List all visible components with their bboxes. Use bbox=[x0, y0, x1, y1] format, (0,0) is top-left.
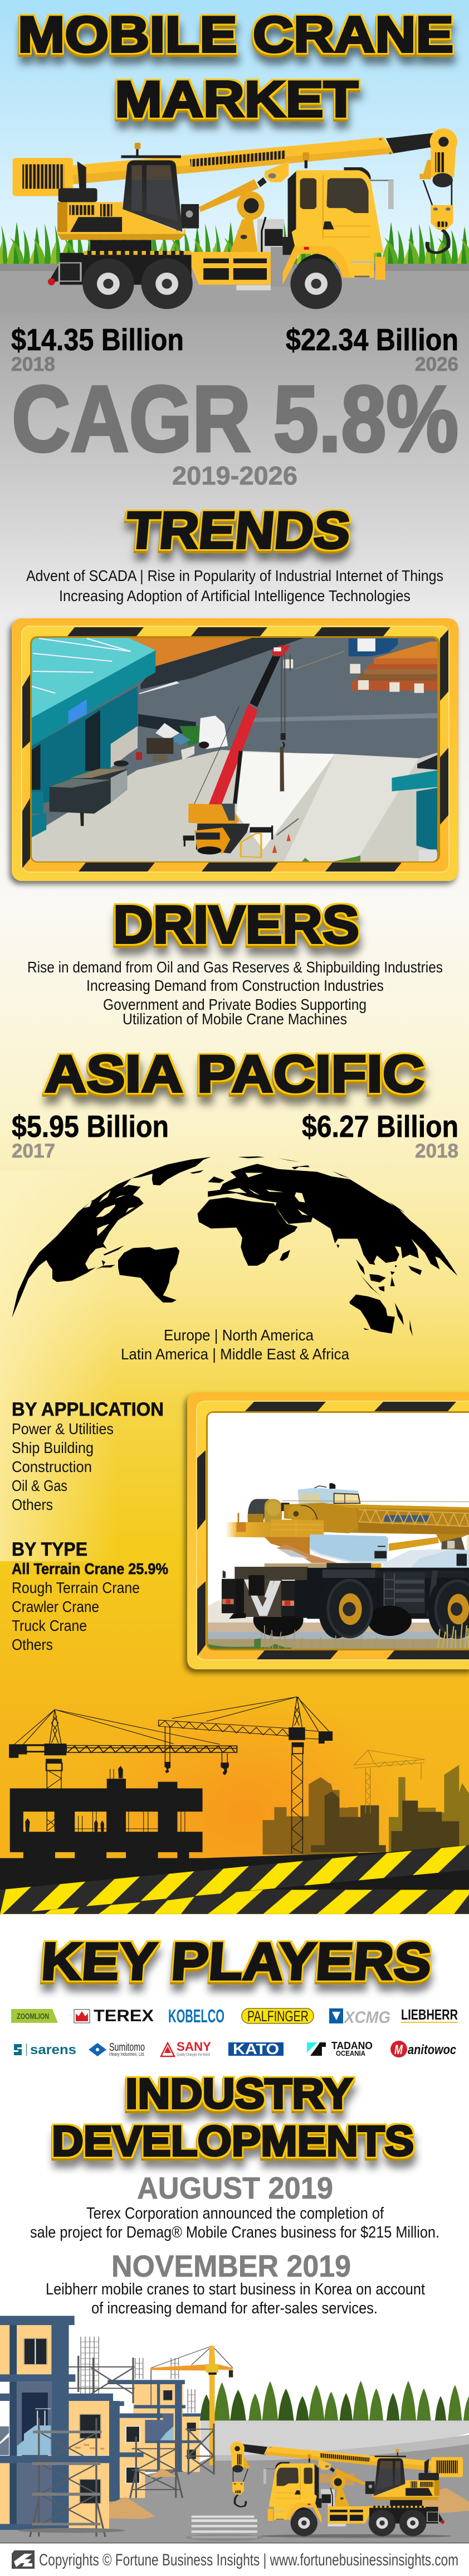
skyline bbox=[262, 1765, 469, 1854]
tower crane 2 bbox=[159, 1697, 329, 1853]
market value 2018: 2018 bbox=[11, 354, 55, 375]
logo: Manitowoc: anitowoc bbox=[408, 2042, 456, 2057]
rear tail with V marking bbox=[222, 1571, 309, 1636]
logo: Manitowoc bbox=[390, 2041, 456, 2057]
logo: Tadano Oceania: TADANO bbox=[331, 2040, 373, 2051]
by application list: Power & Utilities bbox=[12, 1420, 114, 1437]
scaffolding bbox=[30, 2356, 215, 2537]
logo: Sany: SANY bbox=[177, 2040, 211, 2054]
wall and ground bbox=[201, 2420, 469, 2455]
logo: Terex: TEREX bbox=[94, 2007, 154, 2025]
by type list bbox=[12, 1539, 168, 1653]
trends text bbox=[26, 567, 443, 604]
crane in bottom scene bbox=[230, 2442, 463, 2536]
by application list: BY APPLICATION bbox=[12, 1399, 164, 1420]
drivers text bbox=[27, 958, 443, 1028]
market value 2026 bbox=[286, 322, 458, 375]
by type list: Others bbox=[12, 1636, 53, 1653]
foreground weeds bbox=[262, 1625, 429, 1649]
logo: Kato: KATO bbox=[233, 2041, 279, 2057]
panel: segment photo frame bbox=[187, 1392, 469, 1669]
title: MOBILE CRANE bbox=[18, 7, 453, 63]
hero mobile crane illustration bbox=[13, 128, 457, 309]
crane cab bbox=[298, 1483, 361, 1504]
logo: Palfinger: PALFINGER bbox=[247, 2008, 309, 2025]
footer rule bbox=[0, 2543, 469, 2544]
logo: XCMG: XCMG bbox=[343, 2008, 390, 2027]
logo: Manitowoc: M bbox=[394, 2042, 403, 2057]
title bbox=[18, 7, 453, 128]
world map silhouette bbox=[12, 1156, 458, 1337]
by type list: Truck Crane bbox=[12, 1617, 87, 1634]
counterweight body bbox=[310, 1534, 388, 1563]
heading: key players: KEY PLAYERS bbox=[40, 1932, 433, 1991]
logo: Tadano Oceania: OCEANIA bbox=[336, 2049, 366, 2057]
drivers text: Increasing Demand from Construction Industries bbox=[86, 977, 384, 994]
CAGR period: 2019-2026 bbox=[172, 461, 297, 490]
footer logo bbox=[12, 2550, 35, 2569]
grass strip bbox=[0, 222, 469, 264]
logo: Kobelco: KOBELCO bbox=[168, 2006, 224, 2026]
photo: mobile crane at industrial yard bbox=[30, 636, 439, 864]
logo: Tadano Oceania bbox=[307, 2040, 373, 2057]
logo: Zoomlion: ZOOMLION bbox=[17, 2012, 49, 2021]
construction site silhouette bbox=[0, 1697, 469, 1914]
regions text: Latin America | Middle East & Africa bbox=[121, 1345, 349, 1363]
main building bbox=[0, 2316, 75, 2325]
carrier deck bbox=[234, 1549, 469, 1580]
asia pacific value 2018: 2018 bbox=[415, 1140, 458, 1162]
heading: industry developments: DEVELOPMENTS bbox=[52, 2118, 414, 2165]
ground and hazard tape bbox=[0, 1845, 469, 1890]
logo: Sumitomo: Heavy Industries, Ltd. bbox=[109, 2051, 145, 2057]
panel: photo frame with hazard stripes bbox=[12, 618, 458, 881]
tower crane 1 bbox=[14, 1710, 227, 1873]
market value 2018 bbox=[11, 322, 184, 375]
winch drums bbox=[248, 1499, 290, 1529]
development: November 2019: of increasing demand for after-sales services. bbox=[91, 2299, 378, 2317]
logo: Terex bbox=[74, 2007, 154, 2025]
by type list: Crawler Crane bbox=[12, 1598, 99, 1615]
logo: Zoomlion bbox=[11, 2009, 58, 2023]
crane boom bbox=[323, 1504, 469, 1535]
development: November 2019: NOVEMBER 2019 bbox=[111, 2249, 351, 2283]
logo: Sany bbox=[161, 2040, 211, 2057]
regions text bbox=[121, 1326, 349, 1363]
asia pacific value 2018 bbox=[302, 1109, 458, 1162]
stacked slabs bbox=[192, 2516, 257, 2538]
wheels bbox=[318, 1579, 469, 1639]
building frame bbox=[10, 1779, 203, 1858]
by type list: Rough Terrain Crane bbox=[12, 1579, 140, 1596]
title: MARKET bbox=[115, 71, 358, 128]
heading: industry developments: INDUSTRY bbox=[125, 2070, 353, 2118]
market value 2018: $14.35 Billion bbox=[11, 322, 184, 357]
photo: all terrain crane bbox=[208, 1413, 469, 1649]
by application list: Others bbox=[12, 1496, 53, 1513]
logo: Sarens bbox=[14, 2042, 76, 2057]
development: August 2019 bbox=[30, 2171, 439, 2241]
bottom construction scene bbox=[0, 2316, 469, 2543]
rebar towers bbox=[81, 2337, 195, 2413]
trends text: Increasing Adoption of Artificial Intelligence Technologies bbox=[59, 587, 411, 604]
development: November 2019 bbox=[46, 2249, 425, 2317]
development: August 2019: Terex Corporation announced the completion of bbox=[86, 2205, 384, 2222]
workers bbox=[25, 1766, 123, 1832]
development: August 2019: AUGUST 2019 bbox=[137, 2171, 333, 2205]
drivers text: Utilization of Mobile Crane Machines bbox=[123, 1010, 347, 1028]
asia pacific value 2017: $5.95 Billion bbox=[12, 1109, 169, 1144]
logo: Sumitomo: Sumitomo bbox=[109, 2041, 145, 2054]
logo: Sumitomo bbox=[89, 2041, 145, 2057]
sand piles bbox=[109, 2497, 155, 2519]
market value 2026: 2026 bbox=[415, 354, 458, 375]
drivers text: Government and Private Bodies Supporting bbox=[103, 996, 367, 1013]
by type list: BY TYPE bbox=[12, 1539, 87, 1560]
rear buildings bbox=[108, 2380, 185, 2472]
hook 1 bbox=[164, 1762, 170, 1773]
carrier chassis bbox=[307, 1568, 469, 1619]
by type list: All Terrain Crane 25.9% bbox=[12, 1560, 168, 1577]
logo: Sany: Quality Changes the World bbox=[177, 2053, 210, 2057]
heading: trends: TRENDS bbox=[124, 501, 353, 559]
tower crane yellow bbox=[151, 2346, 233, 2405]
by application list: Oil & Gas bbox=[12, 1477, 67, 1494]
distant crane bbox=[354, 1750, 425, 1813]
by application list: Construction bbox=[12, 1458, 92, 1475]
logo: Sarens: sarens bbox=[30, 2042, 76, 2057]
rear platform bbox=[226, 1513, 324, 1537]
regions text: Europe | North America bbox=[164, 1326, 314, 1344]
heading: industry developments bbox=[52, 2070, 414, 2165]
trees bbox=[200, 2381, 469, 2420]
asia pacific value 2017: 2017 bbox=[12, 1140, 55, 1162]
hook 2 bbox=[221, 1762, 229, 1775]
by application list: Ship Building bbox=[12, 1439, 94, 1456]
asia pacific value 2017 bbox=[12, 1109, 169, 1162]
heading: asia pacific: ASIA PACIFIC bbox=[45, 1044, 424, 1103]
development: November 2019: Leibherr mobile cranes to start business in Korea on account bbox=[46, 2280, 425, 2298]
by application list bbox=[12, 1399, 164, 1513]
heading: drivers: DRIVERS bbox=[113, 895, 359, 955]
